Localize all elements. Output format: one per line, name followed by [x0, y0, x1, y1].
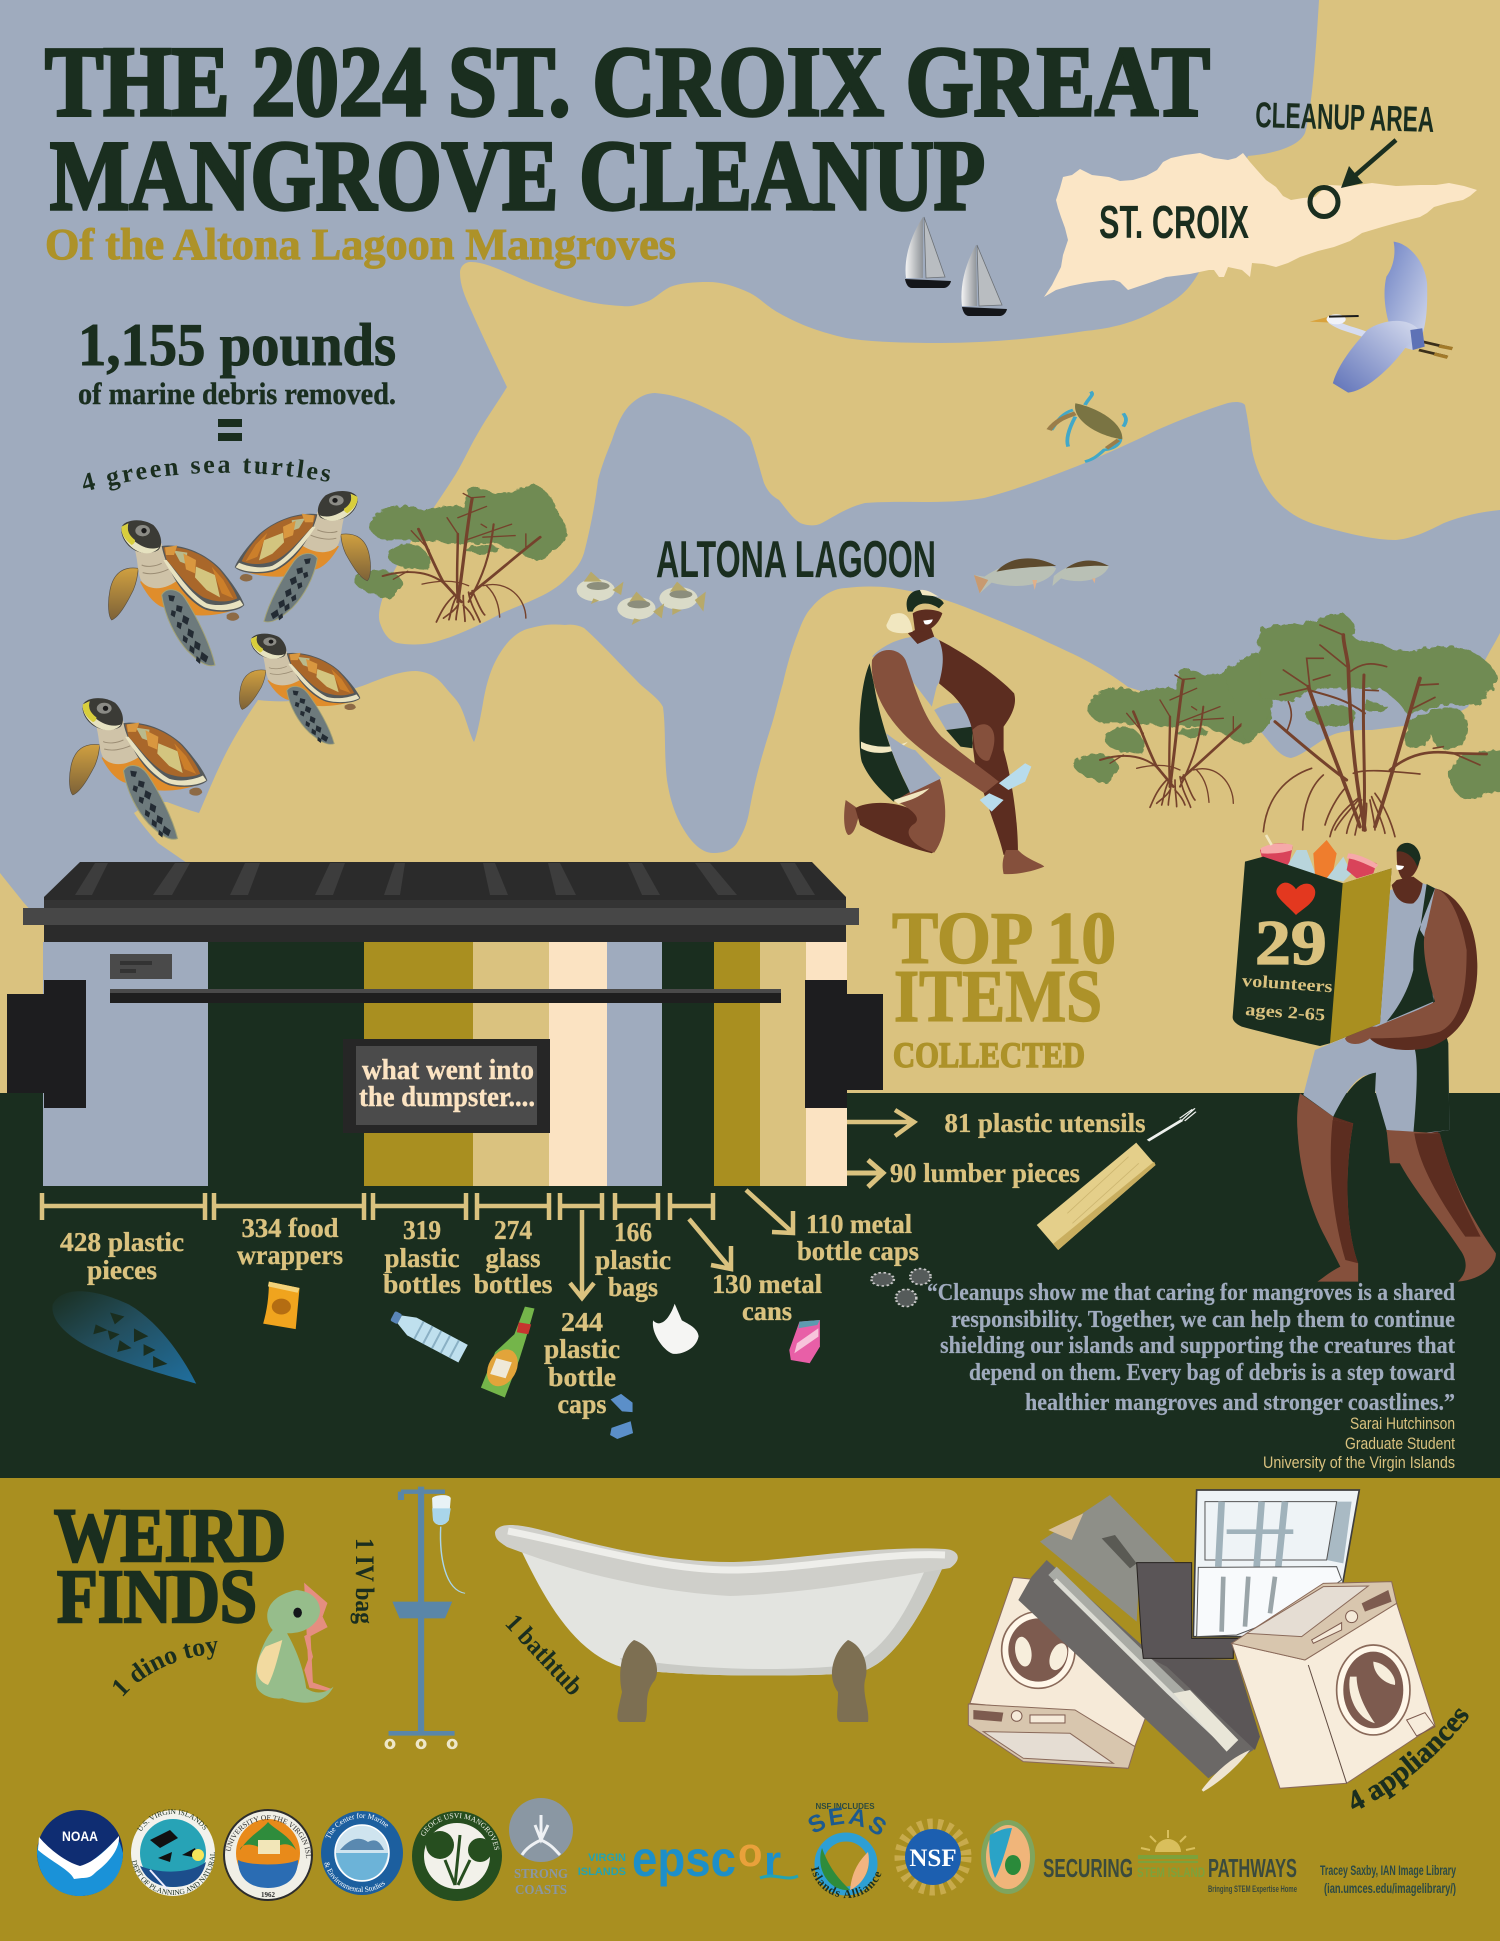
quote: “Cleanups show me that caring for mangroves is a shared	[927, 1280, 1456, 1306]
bag contents	[1260, 835, 1378, 882]
label: metal cans	[712, 1269, 822, 1326]
icon: glass bottle	[481, 1307, 534, 1397]
right washer	[1232, 1582, 1435, 1788]
logo: Strong Coasts: COASTS	[515, 1883, 567, 1898]
label: plastic bottle caps	[544, 1307, 620, 1419]
label: plastic bags: bags	[608, 1272, 658, 1302]
label: plastic utensils: 81 plastic utensils	[944, 1108, 1146, 1138]
logo: Virgin Islands EPSCoR: VIRGIN	[588, 1852, 626, 1864]
quote attribution: Graduate Student	[1345, 1434, 1455, 1453]
label: plastic bags: 166	[614, 1217, 652, 1247]
logo: NSF: NSF	[909, 1845, 957, 1872]
icon: clawfoot bathtub	[495, 1525, 958, 1722]
sign: what went into the dumpster: what went into	[362, 1055, 534, 1086]
icon: sea turtle 2	[235, 491, 371, 622]
mangrove tree: large	[1223, 613, 1500, 837]
logo: Securing STEM Island Pathways	[1043, 1830, 1297, 1894]
logo: Strong Coasts	[509, 1798, 573, 1898]
label: metal bottle caps: bottle caps	[797, 1236, 919, 1266]
quote attribution: Sarai Hutchinson	[1350, 1414, 1455, 1433]
icon: plastic fragments	[52, 1291, 196, 1384]
label: metal bottle caps	[797, 1209, 919, 1266]
icon: dino toy	[256, 1587, 334, 1703]
heading: weird finds: FINDS	[57, 1555, 257, 1639]
label: plastic pieces: pieces	[87, 1255, 157, 1285]
label: metal cans: cans	[742, 1296, 792, 1326]
logo: NOAA: NOAA	[62, 1828, 98, 1844]
dumpster	[7, 862, 883, 1186]
dumpster stripes	[43, 942, 847, 1186]
label: food wrappers: 334 food	[242, 1213, 338, 1243]
icon: sea turtle 4	[69, 698, 207, 839]
subtitle: Of the Altona Lagoon Mangroves	[45, 220, 676, 269]
icon: sea turtle 3	[239, 634, 360, 744]
logo: Securing STEM Island Pathways: Bringing STEM Expertise Home	[1208, 1884, 1297, 1894]
sand: upper coastline	[379, 0, 1500, 644]
logo: University of the Virgin Islands	[223, 1809, 313, 1901]
heading: top 10 items collected: ITEMS	[894, 956, 1102, 1038]
mangrove tree: small on peninsula	[354, 484, 567, 622]
heading: weird finds	[54, 1494, 286, 1639]
logo: Virgin Islands EPSCoR: o	[738, 1831, 762, 1875]
logo: University of the Virgin Islands: UNIVERSITY OF THE VIRGIN ISLANDS	[226, 1815, 311, 1858]
logo: Navigating Waves	[981, 1820, 1035, 1894]
logo: NSF	[900, 1824, 966, 1890]
label: plastic bottles: bottles	[383, 1269, 461, 1299]
logo: Virgin Islands EPSCoR	[578, 1831, 798, 1887]
icon: plastic fork	[1148, 1108, 1196, 1141]
dark ground band	[0, 1093, 1500, 1479]
label: food wrappers	[237, 1213, 343, 1270]
mangrove tree: middle	[1073, 665, 1271, 807]
label: plastic bottles: 319	[403, 1215, 441, 1245]
icon: IV stand	[386, 1487, 465, 1748]
icon: school of small fish	[577, 572, 706, 625]
dumpster hardware	[7, 954, 883, 1108]
heading: top 10 items collected	[892, 898, 1116, 1075]
label: glass bottles: glass	[486, 1243, 540, 1273]
logo: Center for Marine and Environmental Studies	[321, 1811, 403, 1895]
title: MANGROVE CLEANUP	[50, 120, 985, 231]
location label: Altona Lagoon: ALTONA LAGOON	[656, 531, 936, 589]
logo: Center for Marine and Environmental Studies: The Center for Marine	[325, 1812, 388, 1838]
logo: Securing STEM Island Pathways: PATHWAYS	[1208, 1853, 1297, 1883]
island map: St. Croix	[1044, 153, 1477, 297]
figure: volunteer holding bag: 29	[1255, 908, 1327, 978]
heading: weird finds: WEIRD	[54, 1494, 286, 1578]
oven range	[1018, 1495, 1260, 1792]
title: THE 2024 ST. CROIX GREAT	[45, 26, 1210, 137]
label: metal bottle caps: 110 metal	[806, 1209, 912, 1239]
logo: SEAS Islands Alliance: NSF INCLUDES	[815, 1802, 875, 1811]
logo: Virgin Islands EPSCoR: epsc	[632, 1831, 736, 1887]
logo: SEAS Islands Alliance: Islands Alliance	[810, 1866, 882, 1898]
label: 1 dino toy: 1 dino toy	[113, 1640, 218, 1696]
icon: sea turtle 1	[108, 520, 244, 666]
quote	[927, 1280, 1456, 1416]
stat: pounds removed: 1,155 pounds	[78, 312, 396, 378]
logo: USVI Mangroves: GEOCE USVI MANGROVES	[420, 1813, 500, 1850]
label: metal cans: 130 metal	[712, 1269, 822, 1299]
quote: depend on them. Every bag of debris is a step toward	[969, 1360, 1456, 1386]
icon: blue crab	[1049, 392, 1126, 462]
figure: volunteer legs and feet	[1297, 1105, 1496, 1282]
label: 1 IV bag: 1 IV bag	[350, 1538, 379, 1624]
stat: pounds removed: of marine debris removed.	[78, 376, 396, 411]
quote: shielding our islands and supporting the creatures that	[940, 1333, 1455, 1359]
label: plastic bags: plastic	[595, 1245, 671, 1275]
logo: NOAA	[37, 1810, 123, 1896]
logo: Securing STEM Island Pathways: SECURING	[1043, 1853, 1133, 1883]
dumpster lid	[23, 862, 859, 942]
stat: pounds removed: 4 green sea turtles	[83, 458, 330, 490]
label: plastic bottles	[383, 1215, 461, 1299]
title	[45, 26, 1210, 231]
logo: SEAS Islands Alliance: SEAS	[808, 1807, 886, 1834]
logo: USVI DPNR	[131, 1809, 215, 1896]
logo: Virgin Islands EPSCoR: ISLANDS	[578, 1866, 626, 1878]
gold ground band	[0, 1478, 1500, 1941]
logo: SEAS Islands Alliance	[808, 1802, 886, 1898]
icon: heron	[1310, 242, 1452, 393]
icon: plastic bottle caps	[610, 1394, 633, 1439]
label: plastic bottle caps: plastic	[544, 1334, 620, 1364]
icon: two snappers	[974, 558, 1109, 593]
logo: Virgin Islands EPSCoR: r	[764, 1837, 781, 1886]
stat: pounds removed	[78, 312, 396, 490]
label: plastic pieces	[60, 1227, 184, 1285]
label: plastic bottle caps: 244	[561, 1307, 603, 1337]
island map: St. Croix: ST. CROIX	[1099, 196, 1249, 248]
logo: Strong Coasts: STRONG	[514, 1867, 568, 1882]
quote attribution: University of the Virgin Islands	[1263, 1453, 1455, 1472]
icon: plastic bottle	[388, 1307, 468, 1363]
label: 4 appliances: 4 appliances	[1351, 1708, 1468, 1809]
left washer	[968, 1577, 1153, 1768]
dark cabinet	[1137, 1563, 1240, 1658]
quote: responsibility. Together, we can help them to continue	[951, 1307, 1455, 1333]
label: lumber pieces: 90 lumber pieces	[890, 1158, 1080, 1188]
icon: plastic bag	[653, 1304, 699, 1354]
sailboats	[905, 217, 1007, 316]
label: glass bottles: bottles	[474, 1269, 552, 1299]
logo: USVI DPNR: DEPT OF PLANNING AND NATURAL RESOURCES	[132, 1852, 215, 1895]
logo: Securing STEM Island Pathways: STEM ISLAND	[1137, 1864, 1205, 1880]
credit text	[1320, 1862, 1456, 1896]
icon: metal can	[789, 1320, 820, 1363]
label: glass bottles: 274	[494, 1215, 532, 1245]
sign: what went into the dumpster: the dumpster....	[359, 1082, 535, 1113]
figure: volunteer holding bag: volunteers	[1241, 971, 1333, 996]
brackets for item widths	[42, 1193, 713, 1220]
heading: top 10 items collected: COLLECTED	[893, 1035, 1085, 1075]
heading: top 10 items collected: TOP 10	[892, 898, 1116, 980]
label: food wrappers: wrappers	[237, 1240, 343, 1270]
label: glass bottles	[474, 1215, 552, 1299]
label: plastic bottle caps: caps	[558, 1389, 606, 1419]
label: plastic pieces: 428 plastic	[60, 1227, 184, 1257]
sign: what went into the dumpster	[343, 1039, 550, 1133]
quote attribution	[1263, 1414, 1455, 1472]
icon: lumber piece	[1037, 1143, 1156, 1250]
figure: kneeling volunteer	[844, 590, 1044, 874]
sand: lower coastline	[134, 586, 1500, 1100]
sand: left edge sliver	[0, 873, 44, 1095]
logo: USVI Mangroves	[412, 1811, 502, 1901]
label: plastic bottles: plastic	[384, 1243, 460, 1273]
cleanup area label and marker	[1255, 94, 1435, 216]
quote: healthier mangroves and stronger coastlines.”	[1025, 1390, 1455, 1416]
label: plastic bottle caps: bottle	[548, 1362, 616, 1392]
refrigerator	[1193, 1490, 1359, 1637]
arrows to item labels	[570, 1110, 914, 1298]
icon: appliances pile	[968, 1490, 1435, 1792]
logo: University of the Virgin Islands: 1962	[261, 1891, 276, 1899]
icon: metal bottle caps	[871, 1269, 931, 1307]
logo: USVI DPNR: U.S. VIRGIN ISLANDS	[137, 1809, 208, 1831]
label: plastic bags	[595, 1217, 671, 1302]
figure: volunteer holding bag	[1233, 835, 1477, 1163]
logo: Center for Marine and Environmental Studies: & Environmental Studies	[324, 1862, 385, 1892]
label: 1 bathtub: 1 bathtub	[500, 1608, 589, 1701]
figure: volunteer holding bag: ages 2-65	[1245, 1000, 1326, 1025]
icon: food wrapper	[263, 1282, 300, 1329]
